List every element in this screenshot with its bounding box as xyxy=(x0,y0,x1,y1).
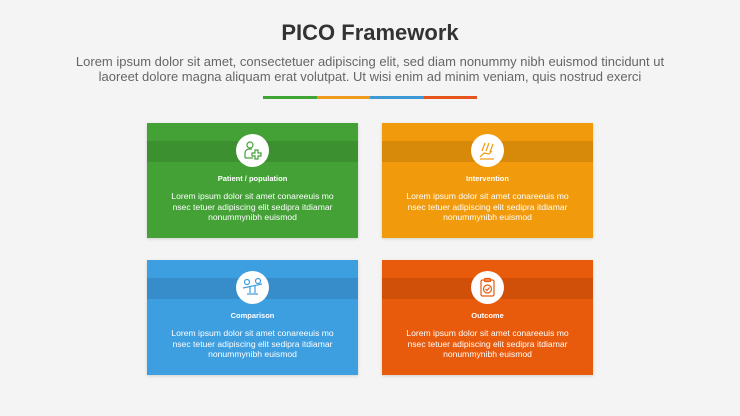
text xyxy=(406,328,569,359)
heading: Outcome xyxy=(471,311,504,320)
text xyxy=(171,191,334,222)
subtitle: Lorem ipsum dolor sit amet, consectetuer adipiscing elit, sed diam nonummy nibh euismod tincidunt ut xyxy=(76,54,664,69)
text: nsec tetuer adipiscing elit sedipra itdiamar xyxy=(172,338,333,348)
text: Lorem ipsum dolor sit amet conareeuis mo xyxy=(171,328,334,338)
text: nonummynibh euismod xyxy=(208,212,297,222)
icon: seesaw xyxy=(236,271,269,304)
panel: outcome xyxy=(382,260,593,375)
icon: person plus xyxy=(236,134,269,167)
subtitle: laoreet dolore magna aliquam erat volutpat. Ut wisi enim ad minim veniam, quis nostrud exerci xyxy=(99,69,641,84)
text: Lorem ipsum dolor sit amet conareeuis mo xyxy=(406,328,569,338)
heading: Comparison xyxy=(231,311,274,320)
heading: Intervention xyxy=(466,174,509,183)
title: PICO Framework xyxy=(281,20,459,45)
panel: intervention xyxy=(382,123,593,238)
text xyxy=(171,328,334,359)
divider line xyxy=(263,96,477,99)
text xyxy=(406,191,569,222)
icon: clipboard check xyxy=(471,271,504,304)
text: Lorem ipsum dolor sit amet conareeuis mo xyxy=(171,191,334,201)
panel: patient xyxy=(147,123,358,238)
text: nsec tetuer adipiscing elit sedipra itdiamar xyxy=(172,202,333,212)
text: nonummynibh euismod xyxy=(443,349,532,359)
icon: hand pills xyxy=(471,134,504,167)
text: nsec tetuer adipiscing elit sedipra itdiamar xyxy=(407,202,568,212)
text: nonummynibh euismod xyxy=(208,349,297,359)
subtitle xyxy=(76,54,664,84)
text: Lorem ipsum dolor sit amet conareeuis mo xyxy=(406,191,569,201)
panel: comparison xyxy=(147,260,358,375)
heading: Patient / population xyxy=(218,174,287,183)
text: nsec tetuer adipiscing elit sedipra itdiamar xyxy=(407,338,568,348)
text: nonummynibh euismod xyxy=(443,212,532,222)
